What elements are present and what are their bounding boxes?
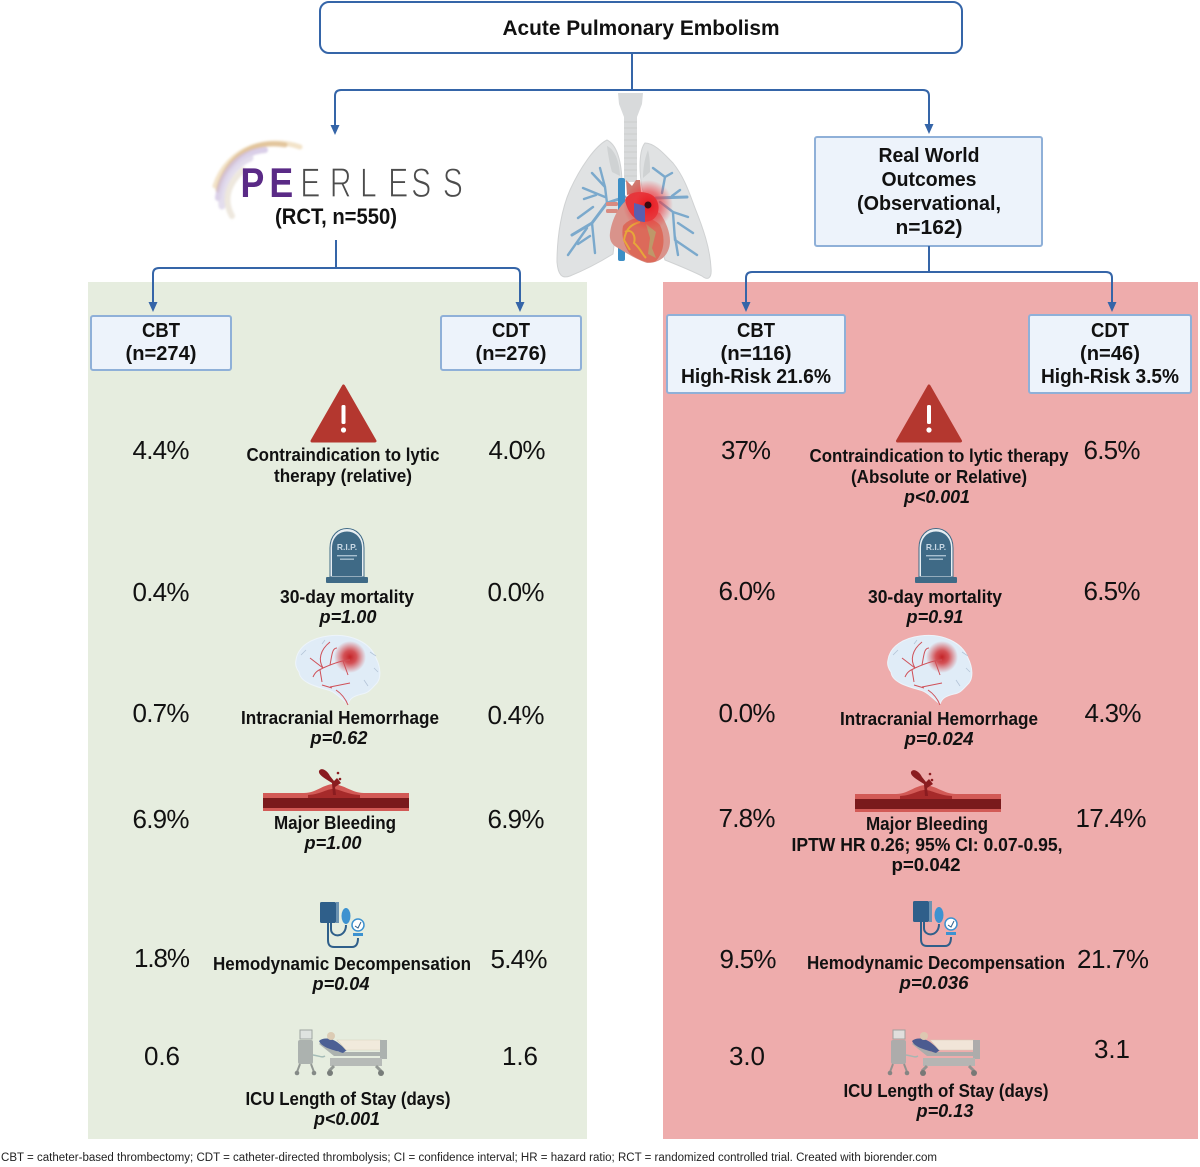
- box: PEERLESS CDT: [441, 316, 581, 370]
- row: PEERLESS hemodynamic decompensation: 5.4%: [490, 944, 548, 974]
- row: Real World intracranial hemorrhage: 0.0%: [718, 698, 776, 728]
- row: PEERLESS mortality: 0.4%: [132, 577, 190, 607]
- box: PEERLESS CDT: CDT: [492, 320, 530, 342]
- box: Real World CDT: High-Risk 3.5%: [1041, 366, 1179, 388]
- box: PEERLESS CBT: [91, 316, 231, 370]
- row: Real World intracranial hemorrhage: 4.3%: [1084, 698, 1142, 728]
- box: Real World CDT: CDT: [1091, 320, 1129, 342]
- row: Real World contraindication: 37%: [721, 435, 771, 465]
- box: Real World CBT: [667, 315, 845, 393]
- row: PEERLESS intracranial hemorrhage: [132, 635, 544, 748]
- row: PEERLESS hemodynamic decompensation: Hemodynamic Decompensation: [213, 954, 471, 974]
- row: PEERLESS ICU stay: [144, 1030, 538, 1129]
- row: PEERLESS major bleeding: [132, 769, 544, 853]
- row: Real World ICU stay: [729, 1030, 1130, 1121]
- box: Real World Outcomes: [815, 137, 1042, 246]
- row: Real World hemodynamic decompensation: Hemodynamic Decompensation: [807, 953, 1065, 973]
- row: Real World ICU stay: p=0.13: [915, 1101, 974, 1121]
- row: Real World mortality: 30-day mortality: [868, 587, 1002, 607]
- row: PEERLESS hemodynamic decompensation: [134, 902, 548, 994]
- logo: PEERLESS: [215, 143, 463, 216]
- box: PEERLESS CBT: CBT: [142, 320, 180, 342]
- row: Real World contraindication: 6.5%: [1084, 435, 1140, 465]
- row: PEERLESS contraindication: therapy (relative): [274, 466, 412, 486]
- row: Real World hemodynamic decompensation: 9.5%: [720, 944, 776, 974]
- box: Real World Outcomes: Real World: [878, 145, 980, 167]
- row: PEERLESS major bleeding: 6.9%: [488, 804, 544, 834]
- row: PEERLESS major bleeding: p=1.00: [303, 833, 362, 853]
- row: Real World hemodynamic decompensation: 21.7%: [1077, 944, 1149, 974]
- row: Real World contraindication: p<0.001: [903, 487, 970, 507]
- row: Real World contraindication: [721, 386, 1140, 507]
- arrow: PEERLESS split: [148, 240, 524, 312]
- row: Real World mortality: 6.0%: [718, 576, 776, 606]
- row: PEERLESS ICU stay: p<0.001: [313, 1109, 380, 1129]
- row: PEERLESS mortality: [132, 528, 544, 627]
- row: PEERLESS hemodynamic decompensation: 1.8%: [134, 943, 190, 973]
- row: PEERLESS mortality: 0.0%: [488, 577, 544, 607]
- row: PEERLESS hemodynamic decompensation: p=0.04: [311, 974, 370, 994]
- box: Real World CBT: High-Risk 21.6%: [681, 366, 831, 388]
- title box: [320, 2, 962, 53]
- row: PEERLESS ICU stay: ICU Length of Stay (days): [246, 1089, 451, 1109]
- row: PEERLESS ICU stay: 0.6: [144, 1041, 180, 1071]
- row: PEERLESS major bleeding: 6.9%: [132, 804, 190, 834]
- row: Real World hemodynamic decompensation: [720, 901, 1149, 993]
- row: PEERLESS contraindication: [132, 386, 546, 486]
- box: Real World Outcomes: (Observational,: [857, 193, 1001, 215]
- row: Real World major bleeding: p=0.042: [892, 855, 960, 875]
- label: RCT n=550: (RCT, n=550): [275, 204, 397, 229]
- row: Real World major bleeding: 17.4%: [1076, 803, 1146, 833]
- row: Real World major bleeding: [718, 770, 1146, 875]
- panel: real world red background: [663, 282, 1198, 1139]
- row: Real World intracranial hemorrhage: p=0.024: [903, 729, 974, 749]
- row: Real World mortality: p=0.91: [905, 607, 964, 627]
- row: Real World ICU stay: ICU Length of Stay (days): [844, 1081, 1049, 1101]
- row: Real World major bleeding: IPTW HR 0.26; 95% CI: 0.07-0.95,: [792, 835, 1062, 855]
- row: PEERLESS contraindication: 4.0%: [488, 435, 546, 465]
- illustration: lungs and heart with embolism: [557, 93, 711, 278]
- panel: PEERLESS green background: [88, 282, 587, 1139]
- logo: PEERLESS: ERLESS: [300, 159, 463, 206]
- row: PEERLESS intracranial hemorrhage: 0.4%: [488, 700, 544, 730]
- row: PEERLESS mortality: p=1.00: [318, 607, 376, 627]
- box: Real World CBT: (n=116): [720, 343, 792, 365]
- box: Real World Outcomes: Outcomes: [882, 169, 976, 191]
- row: Real World intracranial hemorrhage: [718, 635, 1142, 749]
- row: Real World contraindication: (Absolute or Relative): [851, 467, 1027, 487]
- row: Real World intracranial hemorrhage: Intracranial Hemorrhage: [840, 709, 1038, 729]
- box: PEERLESS CBT: (n=274): [126, 343, 196, 365]
- box: Real World CDT: (n=46): [1080, 343, 1140, 365]
- box: PEERLESS CDT: (n=276): [476, 343, 546, 365]
- row: PEERLESS major bleeding: Major Bleeding: [274, 813, 396, 833]
- row: PEERLESS intracranial hemorrhage: p=0.62: [309, 728, 368, 748]
- row: PEERLESS ICU stay: 1.6: [502, 1041, 538, 1071]
- box: Real World CDT: [1029, 315, 1191, 393]
- row: PEERLESS intracranial hemorrhage: Intracranial Hemorrhage: [241, 708, 439, 728]
- row: PEERLESS contraindication: 4.4%: [132, 435, 190, 465]
- row: PEERLESS mortality: 30-day mortality: [280, 587, 414, 607]
- footnote: CBT = catheter-based thrombectomy; CDT = catheter-directed thrombolysis; CI = confidence interval; HR = hazard ratio; RCT = randomized controlled trial. Created with biorender.com: [1, 1152, 937, 1164]
- row: Real World hemodynamic decompensation: p=0.036: [898, 973, 970, 993]
- row: Real World ICU stay: 3.0: [729, 1041, 765, 1071]
- row: Real World major bleeding: 7.8%: [718, 803, 776, 833]
- row: PEERLESS intracranial hemorrhage: 0.7%: [132, 698, 190, 728]
- row: Real World major bleeding: Major Bleeding: [866, 814, 988, 834]
- title box: Acute Pulmonary Embolism: [502, 17, 780, 40]
- box: Real World Outcomes: n=162): [896, 217, 962, 239]
- row: Real World mortality: 6.5%: [1084, 576, 1140, 606]
- row: Real World contraindication: Contraindication to lytic therapy: [810, 446, 1068, 466]
- row: Real World ICU stay: 3.1: [1094, 1034, 1130, 1064]
- row: PEERLESS contraindication: Contraindication to lytic: [246, 445, 440, 465]
- arrow: Real world split: [742, 246, 1116, 312]
- row: Real World mortality: [718, 528, 1140, 627]
- box: Real World CBT: CBT: [737, 320, 775, 342]
- arrow: title to both arms: [330, 53, 934, 135]
- logo: PEERLESS: PE: [241, 160, 293, 207]
